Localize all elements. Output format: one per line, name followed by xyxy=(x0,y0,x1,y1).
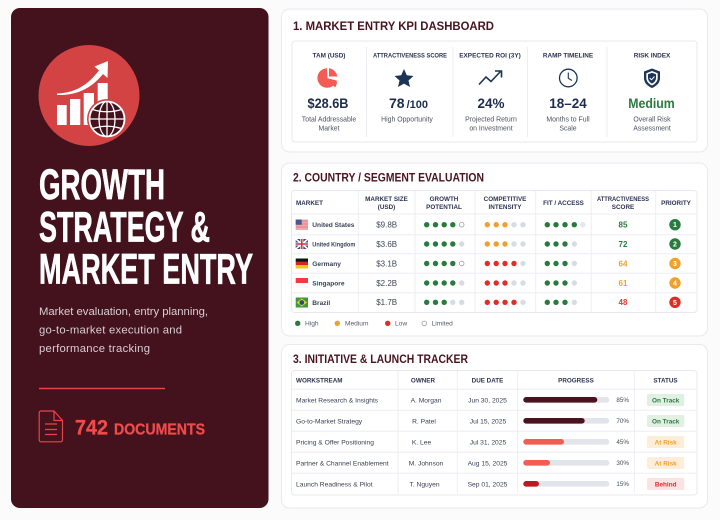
KPI: TAM xyxy=(302,52,356,132)
KPI: ROI xyxy=(459,52,521,132)
subtitle: go-to-market execution and xyxy=(39,324,182,336)
row: launch readiness xyxy=(296,478,684,490)
panel: left cover xyxy=(11,8,268,508)
icon: star xyxy=(394,69,414,87)
priority badges: 4 xyxy=(673,280,677,288)
row: pricing xyxy=(296,436,684,448)
competitive intensity dots xyxy=(485,222,526,305)
market names: Germany xyxy=(312,261,341,268)
row: pricing: Pricing & Offer Positioning xyxy=(296,440,374,446)
growth potential dots xyxy=(424,222,464,305)
document count: DOCUMENTS xyxy=(114,422,205,438)
row: go-to-market: On Track xyxy=(652,418,680,425)
table header: PROGRESS xyxy=(558,378,594,385)
attractiveness scores: 48 xyxy=(619,298,628,307)
table header: INTENSITY xyxy=(489,204,522,211)
row: go-to-market: Jul 15, 2025 xyxy=(470,418,506,426)
title: STRATEGY & xyxy=(39,204,210,252)
row: launch readiness: Launch Readiness & Pilot xyxy=(296,482,373,488)
market names: Brazil xyxy=(312,300,330,307)
row: launch readiness: Sep 01, 2025 xyxy=(468,482,508,488)
table header: COMPETITIVE xyxy=(484,196,526,203)
row: go-to-market: R. Patel xyxy=(412,418,436,426)
title: MARKET ENTRY xyxy=(39,246,253,294)
KPI: ramp timeline: RAMP TIMELINE xyxy=(543,52,594,59)
row: pricing: 45% xyxy=(616,439,629,446)
KPI: attractiveness: ATTRACTIVENESS SCORE xyxy=(373,52,448,59)
attractiveness scores: 61 xyxy=(619,279,628,288)
table header: (USD) xyxy=(378,204,395,211)
table header: POTENTIAL xyxy=(426,204,462,211)
market sizes: $2.2B xyxy=(376,279,397,288)
subtitle: performance tracking xyxy=(39,343,150,355)
KPI: ROI: Projected Return xyxy=(465,117,517,124)
row: market research: Market Research & Insights xyxy=(296,398,379,404)
attractiveness scores: 72 xyxy=(619,240,628,249)
table header: GROWTH xyxy=(430,196,459,203)
market names xyxy=(312,222,355,307)
KPI: attractiveness: 78/100 xyxy=(389,95,428,111)
row: go-to-market: Go-to-Market Strategy xyxy=(296,418,363,426)
panel: initiative tracker xyxy=(282,344,708,508)
KPI: ROI: on Investment xyxy=(469,126,513,132)
title xyxy=(39,161,253,294)
row: launch readiness: 15% xyxy=(616,481,629,488)
market names: Singapore xyxy=(312,280,345,287)
KPI: risk index xyxy=(628,52,675,132)
priority badges xyxy=(669,219,681,308)
heading: KPI dashboard: 1. MARKET ENTRY KPI DASHBOARD xyxy=(293,21,494,33)
market sizes: $3.1B xyxy=(376,259,397,268)
attractiveness scores xyxy=(619,221,628,307)
row: pricing: Jul 31, 2025 xyxy=(470,440,506,446)
legend: Low xyxy=(395,321,407,328)
table header: WORKSTREAM xyxy=(296,378,343,385)
KPI: risk index: Medium xyxy=(628,95,675,111)
table header: SCORE xyxy=(612,204,634,211)
icon: trend arrow xyxy=(479,71,502,84)
subtitle xyxy=(39,306,208,355)
market sizes xyxy=(376,220,397,307)
table header: FIT / ACCESS xyxy=(543,200,584,207)
KPI: TAM: Market xyxy=(318,126,340,132)
legend: Limited xyxy=(432,321,453,328)
document count: 742 xyxy=(75,416,108,440)
KPI: attractiveness xyxy=(373,52,448,124)
priority badges: 1 xyxy=(673,222,677,229)
fit and access dots xyxy=(545,222,585,305)
title: GROWTH xyxy=(39,161,165,209)
market names: United Kingdom xyxy=(312,241,355,248)
table header: MARKET SIZE xyxy=(365,196,408,203)
panel: KPI dashboard xyxy=(282,9,708,152)
heading: country evaluation: 2. COUNTRY / SEGMENT EVALUATION xyxy=(293,173,484,185)
KPI: attractiveness: High Opportunity xyxy=(381,117,433,124)
icon: document xyxy=(39,411,63,442)
document count xyxy=(75,416,205,440)
icon: growth chart and globe xyxy=(38,45,140,146)
priority badges: 2 xyxy=(673,242,677,248)
KPI: ramp timeline xyxy=(543,52,594,132)
KPI: ROI: 24% xyxy=(478,95,505,111)
row: partner: Partner & Channel Enablement xyxy=(296,460,389,468)
row: partner: At Risk xyxy=(655,460,677,467)
row: go-to-market xyxy=(296,415,684,427)
row: partner: M. Johnson xyxy=(409,460,444,468)
priority badges: 5 xyxy=(673,300,677,307)
row: market research: 85% xyxy=(616,397,629,404)
row: market research: A. Morgan xyxy=(411,398,442,404)
priority badges: 3 xyxy=(673,261,677,268)
table header: DUE DATE xyxy=(472,378,503,385)
attractiveness scores: 85 xyxy=(619,221,628,230)
table header: OWNER xyxy=(411,378,436,385)
row: pricing: At Risk xyxy=(655,439,677,446)
row: market research: On Track xyxy=(652,397,680,404)
KPI: ramp timeline: 18–24 xyxy=(549,95,587,111)
table header: PRIORITY xyxy=(661,200,692,207)
row: pricing: K. Lee xyxy=(412,440,431,446)
KPI: risk index: Overall Risk xyxy=(633,117,671,124)
market sizes: $3.6B xyxy=(376,240,397,249)
icon: shield xyxy=(644,68,660,88)
subtitle: Market evaluation, entry planning, xyxy=(39,306,208,318)
row: market research xyxy=(296,394,684,406)
KPI: risk index: RISK INDEX xyxy=(634,52,671,59)
icon: clock xyxy=(560,69,577,87)
flags xyxy=(296,220,308,308)
KPI: risk index: Assessment xyxy=(633,126,671,132)
market sizes: $9.8B xyxy=(376,220,397,230)
table header xyxy=(296,196,692,211)
legend: High xyxy=(305,321,319,328)
KPI: TAM: $28.6B xyxy=(308,95,348,111)
KPI: TAM: TAM (USD) xyxy=(313,52,345,59)
market names: United States xyxy=(312,222,355,229)
KPI: ROI: EXPECTED ROI (3Y) xyxy=(459,52,521,59)
row: partner: 30% xyxy=(616,460,629,467)
heading: initiative tracker: 3. INITIATIVE & LAUNCH TRACKER xyxy=(293,354,469,366)
legend: Medium xyxy=(345,321,369,328)
panel: country evaluation xyxy=(282,163,708,336)
icon: pie chart xyxy=(317,68,337,88)
row: go-to-market: 70% xyxy=(616,418,629,425)
row: partner xyxy=(296,457,684,469)
table header: MARKET xyxy=(296,200,323,207)
table header: STATUS xyxy=(653,378,678,385)
KPI: ramp timeline: Scale xyxy=(559,126,577,132)
legend xyxy=(295,321,453,328)
attractiveness scores: 64 xyxy=(619,259,628,268)
row: launch readiness: Behind xyxy=(655,481,677,488)
market sizes: $1.7B xyxy=(376,298,397,307)
row: launch readiness: T. Nguyen xyxy=(409,482,440,488)
table header: ATTRACTIVENESS xyxy=(597,196,649,203)
row: market research: Jun 30, 2025 xyxy=(468,398,507,404)
KPI: ramp timeline: Months to Full xyxy=(546,117,590,124)
row: partner: Aug 15, 2025 xyxy=(468,460,508,468)
KPI: TAM: Total Addressable xyxy=(302,117,356,124)
table header xyxy=(296,378,678,385)
